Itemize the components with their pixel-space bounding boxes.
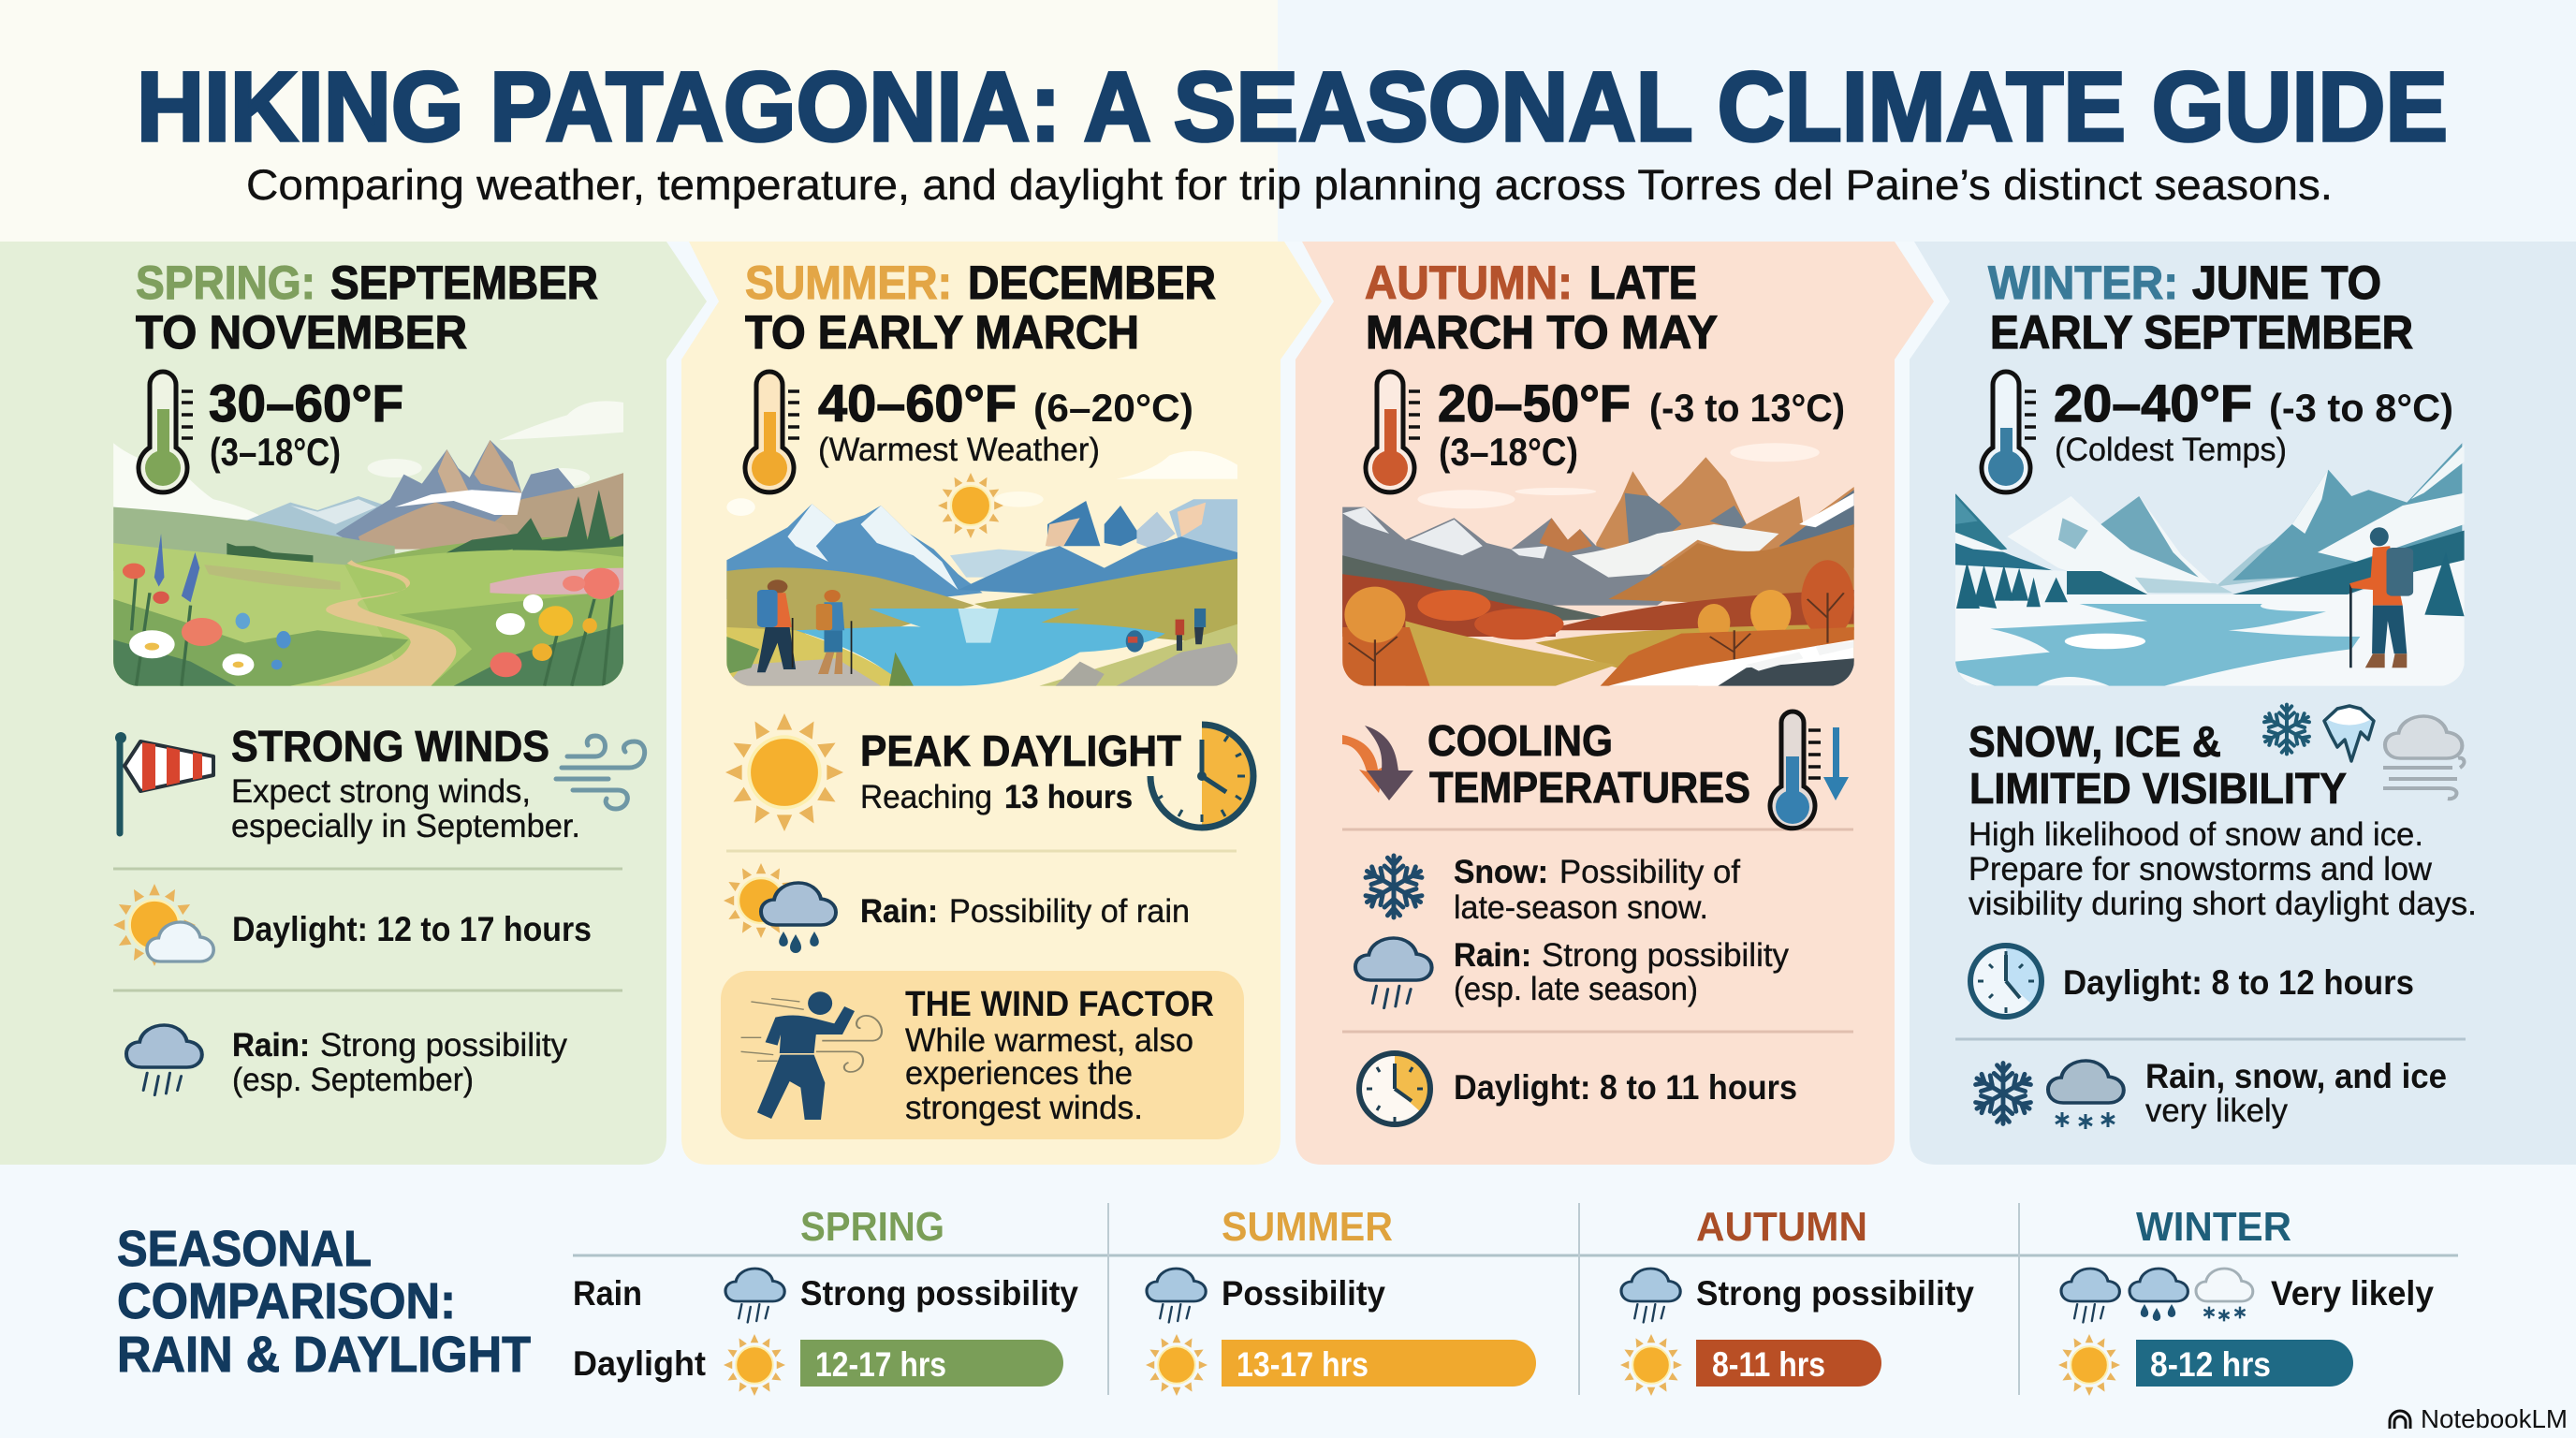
winter column bbox=[2058, 1204, 2434, 1396]
icon: fog cloud bbox=[2383, 716, 2464, 799]
icon: rain cloud bbox=[126, 1025, 202, 1095]
summer temperature: (Warmest Weather) bbox=[818, 432, 1100, 468]
autumn heading: MARCH TO MAY bbox=[1366, 306, 1718, 359]
icon: wind swirls bbox=[556, 736, 645, 809]
icon: daylight clock bbox=[1150, 725, 1253, 828]
icon: cooling thermometer bbox=[1770, 712, 1849, 829]
winter precipitation text: Rain, snow, and ice bbox=[2145, 1057, 2447, 1095]
autumn rain text: Strong possibility bbox=[1542, 937, 1789, 974]
wind factor text: experiences the bbox=[905, 1055, 1133, 1092]
icon: rain cloud bbox=[1355, 938, 1432, 1008]
wind factor text: strongest winds. bbox=[905, 1090, 1143, 1126]
panel: autumn bbox=[1295, 242, 1934, 1165]
autumn column: 8-11 hrs bbox=[1712, 1345, 1825, 1384]
summer temperature bbox=[818, 374, 1193, 468]
winter heading: WINTER: bbox=[1988, 257, 2178, 309]
autumn column: Strong possibility bbox=[1696, 1274, 1974, 1313]
panel: spring bbox=[0, 242, 707, 1165]
icon: sun behind rain cloud bbox=[724, 863, 836, 953]
autumn snow text: Possibility of bbox=[1559, 854, 1740, 890]
cooling temperatures text: TEMPERATURES bbox=[1429, 763, 1750, 812]
summer column: 13-17 hrs bbox=[1237, 1345, 1368, 1384]
icon: person in wind bbox=[741, 991, 882, 1120]
spring thermometer bbox=[139, 372, 193, 492]
autumn rain text: (esp. late season) bbox=[1454, 971, 1698, 1007]
icon: snowflake bbox=[2261, 705, 2312, 754]
autumn snow text: Snow: bbox=[1454, 854, 1548, 890]
spring heading: TO NOVEMBER bbox=[136, 306, 467, 359]
snow ice limited visibility heading: LIMITED VISIBILITY bbox=[1969, 764, 2347, 813]
summer heading: TO EARLY MARCH bbox=[745, 306, 1139, 359]
summer column: SUMMER bbox=[1222, 1204, 1393, 1250]
autumn column bbox=[1620, 1204, 1974, 1396]
autumn heading bbox=[1365, 257, 1718, 359]
spring column: Strong possibility bbox=[800, 1274, 1078, 1313]
peak daylight text: PEAK DAYLIGHT bbox=[860, 726, 1181, 775]
spring column: SPRING bbox=[800, 1204, 944, 1250]
winter heading: EARLY SEPTEMBER bbox=[1990, 306, 2413, 359]
autumn snow text bbox=[1454, 854, 1740, 926]
summer landscape illustration bbox=[726, 451, 1237, 686]
subtitle: Comparing weather, temperature, and daylight for trip planning across Torres del Paine’s distinct seasons. bbox=[246, 161, 2333, 209]
winter column: WINTER bbox=[2136, 1204, 2291, 1250]
autumn temperature: (-3 to 13°C) bbox=[1649, 386, 1845, 430]
wind factor text bbox=[905, 985, 1214, 1126]
comparison heading: COMPARISON: bbox=[117, 1273, 456, 1329]
winter precipitation text: very likely bbox=[2145, 1093, 2288, 1129]
comparison heading: RAIN & DAYLIGHT bbox=[117, 1327, 531, 1383]
winter temperature: 20–40°F bbox=[2054, 374, 2252, 433]
winter heading bbox=[1988, 257, 2413, 359]
winter description: visibility during short daylight days. bbox=[1969, 886, 2477, 922]
wind factor text: While warmest, also bbox=[905, 1022, 1193, 1059]
autumn column: AUTUMN bbox=[1696, 1204, 1867, 1250]
winter thermometer bbox=[1982, 372, 2036, 492]
scene sun bbox=[938, 473, 1003, 538]
summer heading: SUMMER: bbox=[745, 257, 952, 309]
strong winds text: especially in September. bbox=[231, 808, 580, 844]
winter heading: JUNE TO bbox=[2192, 257, 2381, 309]
spring rain text: Strong possibility bbox=[320, 1027, 567, 1064]
icon: sun and cloud bbox=[113, 884, 213, 966]
icon: snow cloud bbox=[2048, 1061, 2124, 1129]
autumn rain text: Rain: bbox=[1454, 937, 1531, 974]
spring column bbox=[724, 1204, 1078, 1396]
spring daylight text: Daylight: 12 to 17 hours bbox=[232, 910, 592, 948]
spring heading bbox=[136, 257, 598, 359]
icon: windsock bbox=[115, 732, 213, 833]
spring heading: SEPTEMBER bbox=[330, 257, 598, 309]
peak daylight text: 13 hours bbox=[1004, 779, 1133, 815]
strong winds text: STRONG WINDS bbox=[231, 722, 549, 770]
autumn temperature: (3–18°C) bbox=[1439, 430, 1578, 474]
autumn heading: AUTUMN: bbox=[1365, 257, 1573, 309]
spring heading: SPRING: bbox=[136, 257, 315, 309]
summer rain text: Rain: bbox=[860, 893, 938, 930]
spring column: 12-17 hrs bbox=[815, 1345, 946, 1384]
winter precipitation text bbox=[2145, 1057, 2447, 1129]
row labels: Rain bbox=[573, 1274, 642, 1313]
summer column: Possibility bbox=[1222, 1274, 1385, 1313]
spring temperature: (3–18°C) bbox=[210, 430, 341, 474]
winter temperature bbox=[2054, 374, 2453, 468]
spring rain text: (esp. September) bbox=[232, 1062, 474, 1098]
cooling temperatures text bbox=[1427, 716, 1750, 812]
row labels bbox=[573, 1274, 706, 1383]
row labels: Daylight bbox=[573, 1344, 706, 1383]
spring rain text bbox=[232, 1027, 567, 1098]
title: HIKING PATAGONIA: A SEASONAL CLIMATE GUIDE bbox=[137, 52, 2448, 162]
winter description: High likelihood of snow and ice. bbox=[1969, 816, 2423, 853]
winter description: Prepare for snowstorms and low bbox=[1969, 851, 2433, 888]
icon: snowflake bbox=[1362, 856, 1426, 917]
strong winds text bbox=[231, 722, 580, 844]
winter daylight text: Daylight: 8 to 12 hours bbox=[2063, 963, 2414, 1002]
summer heading bbox=[745, 257, 1216, 359]
callout: the wind factor bbox=[721, 971, 1244, 1139]
icon: cooling arrows bbox=[1342, 726, 1413, 800]
spring temperature bbox=[209, 374, 403, 474]
winter landscape illustration bbox=[1955, 443, 2465, 686]
autumn snow text: late-season snow. bbox=[1454, 889, 1708, 926]
NotebookLM badge: NotebookLM bbox=[2421, 1404, 2568, 1433]
icon: snowflake bbox=[1972, 1064, 2034, 1123]
icon: autumn clock bbox=[1359, 1053, 1430, 1124]
autumn temperature bbox=[1438, 374, 1845, 474]
panel: seasonal comparison bbox=[117, 1203, 2458, 1396]
summer thermometer bbox=[745, 372, 799, 492]
comparison heading bbox=[117, 1221, 531, 1383]
autumn daylight text: Daylight: 8 to 11 hours bbox=[1454, 1068, 1797, 1107]
icon: large sun bbox=[725, 713, 843, 831]
winter column: Very likely bbox=[2271, 1274, 2434, 1313]
spring rain text: Rain: bbox=[232, 1027, 310, 1064]
summer column bbox=[1146, 1204, 1536, 1396]
winter temperature: (-3 to 8°C) bbox=[2269, 386, 2453, 430]
autumn temperature: 20–50°F bbox=[1438, 374, 1631, 433]
comparison heading: SEASONAL bbox=[117, 1221, 372, 1277]
icon: winter clock bbox=[1970, 946, 2042, 1017]
summer heading: DECEMBER bbox=[968, 257, 1216, 309]
summer temperature: (6–20°C) bbox=[1033, 386, 1193, 430]
winter column: 8-12 hrs bbox=[2150, 1345, 2271, 1384]
panel: summer bbox=[681, 242, 1322, 1165]
strong winds text: Expect strong winds, bbox=[231, 773, 531, 810]
summer temperature: 40–60°F bbox=[818, 374, 1017, 433]
spring temperature: 30–60°F bbox=[209, 374, 403, 433]
cooling temperatures text: COOLING bbox=[1427, 716, 1613, 765]
peak daylight text bbox=[860, 726, 1181, 815]
panel: winter bbox=[1910, 242, 2576, 1165]
spring landscape illustration bbox=[113, 401, 623, 686]
autumn rain text bbox=[1454, 937, 1789, 1007]
snow ice limited visibility heading: SNOW, ICE & bbox=[1969, 717, 2221, 766]
peak daylight text: Reaching bbox=[860, 779, 992, 815]
autumn thermometer bbox=[1366, 372, 1420, 492]
summer rain text: Possibility of rain bbox=[949, 893, 1190, 930]
snow ice limited visibility heading bbox=[1969, 717, 2347, 813]
winter description bbox=[1969, 816, 2477, 922]
winter temperature: (Coldest Temps) bbox=[2055, 432, 2287, 468]
autumn landscape illustration bbox=[1342, 443, 1854, 686]
icon: ice bbox=[2324, 706, 2374, 761]
wind factor text: THE WIND FACTOR bbox=[905, 985, 1214, 1024]
autumn heading: LATE bbox=[1589, 257, 1697, 309]
